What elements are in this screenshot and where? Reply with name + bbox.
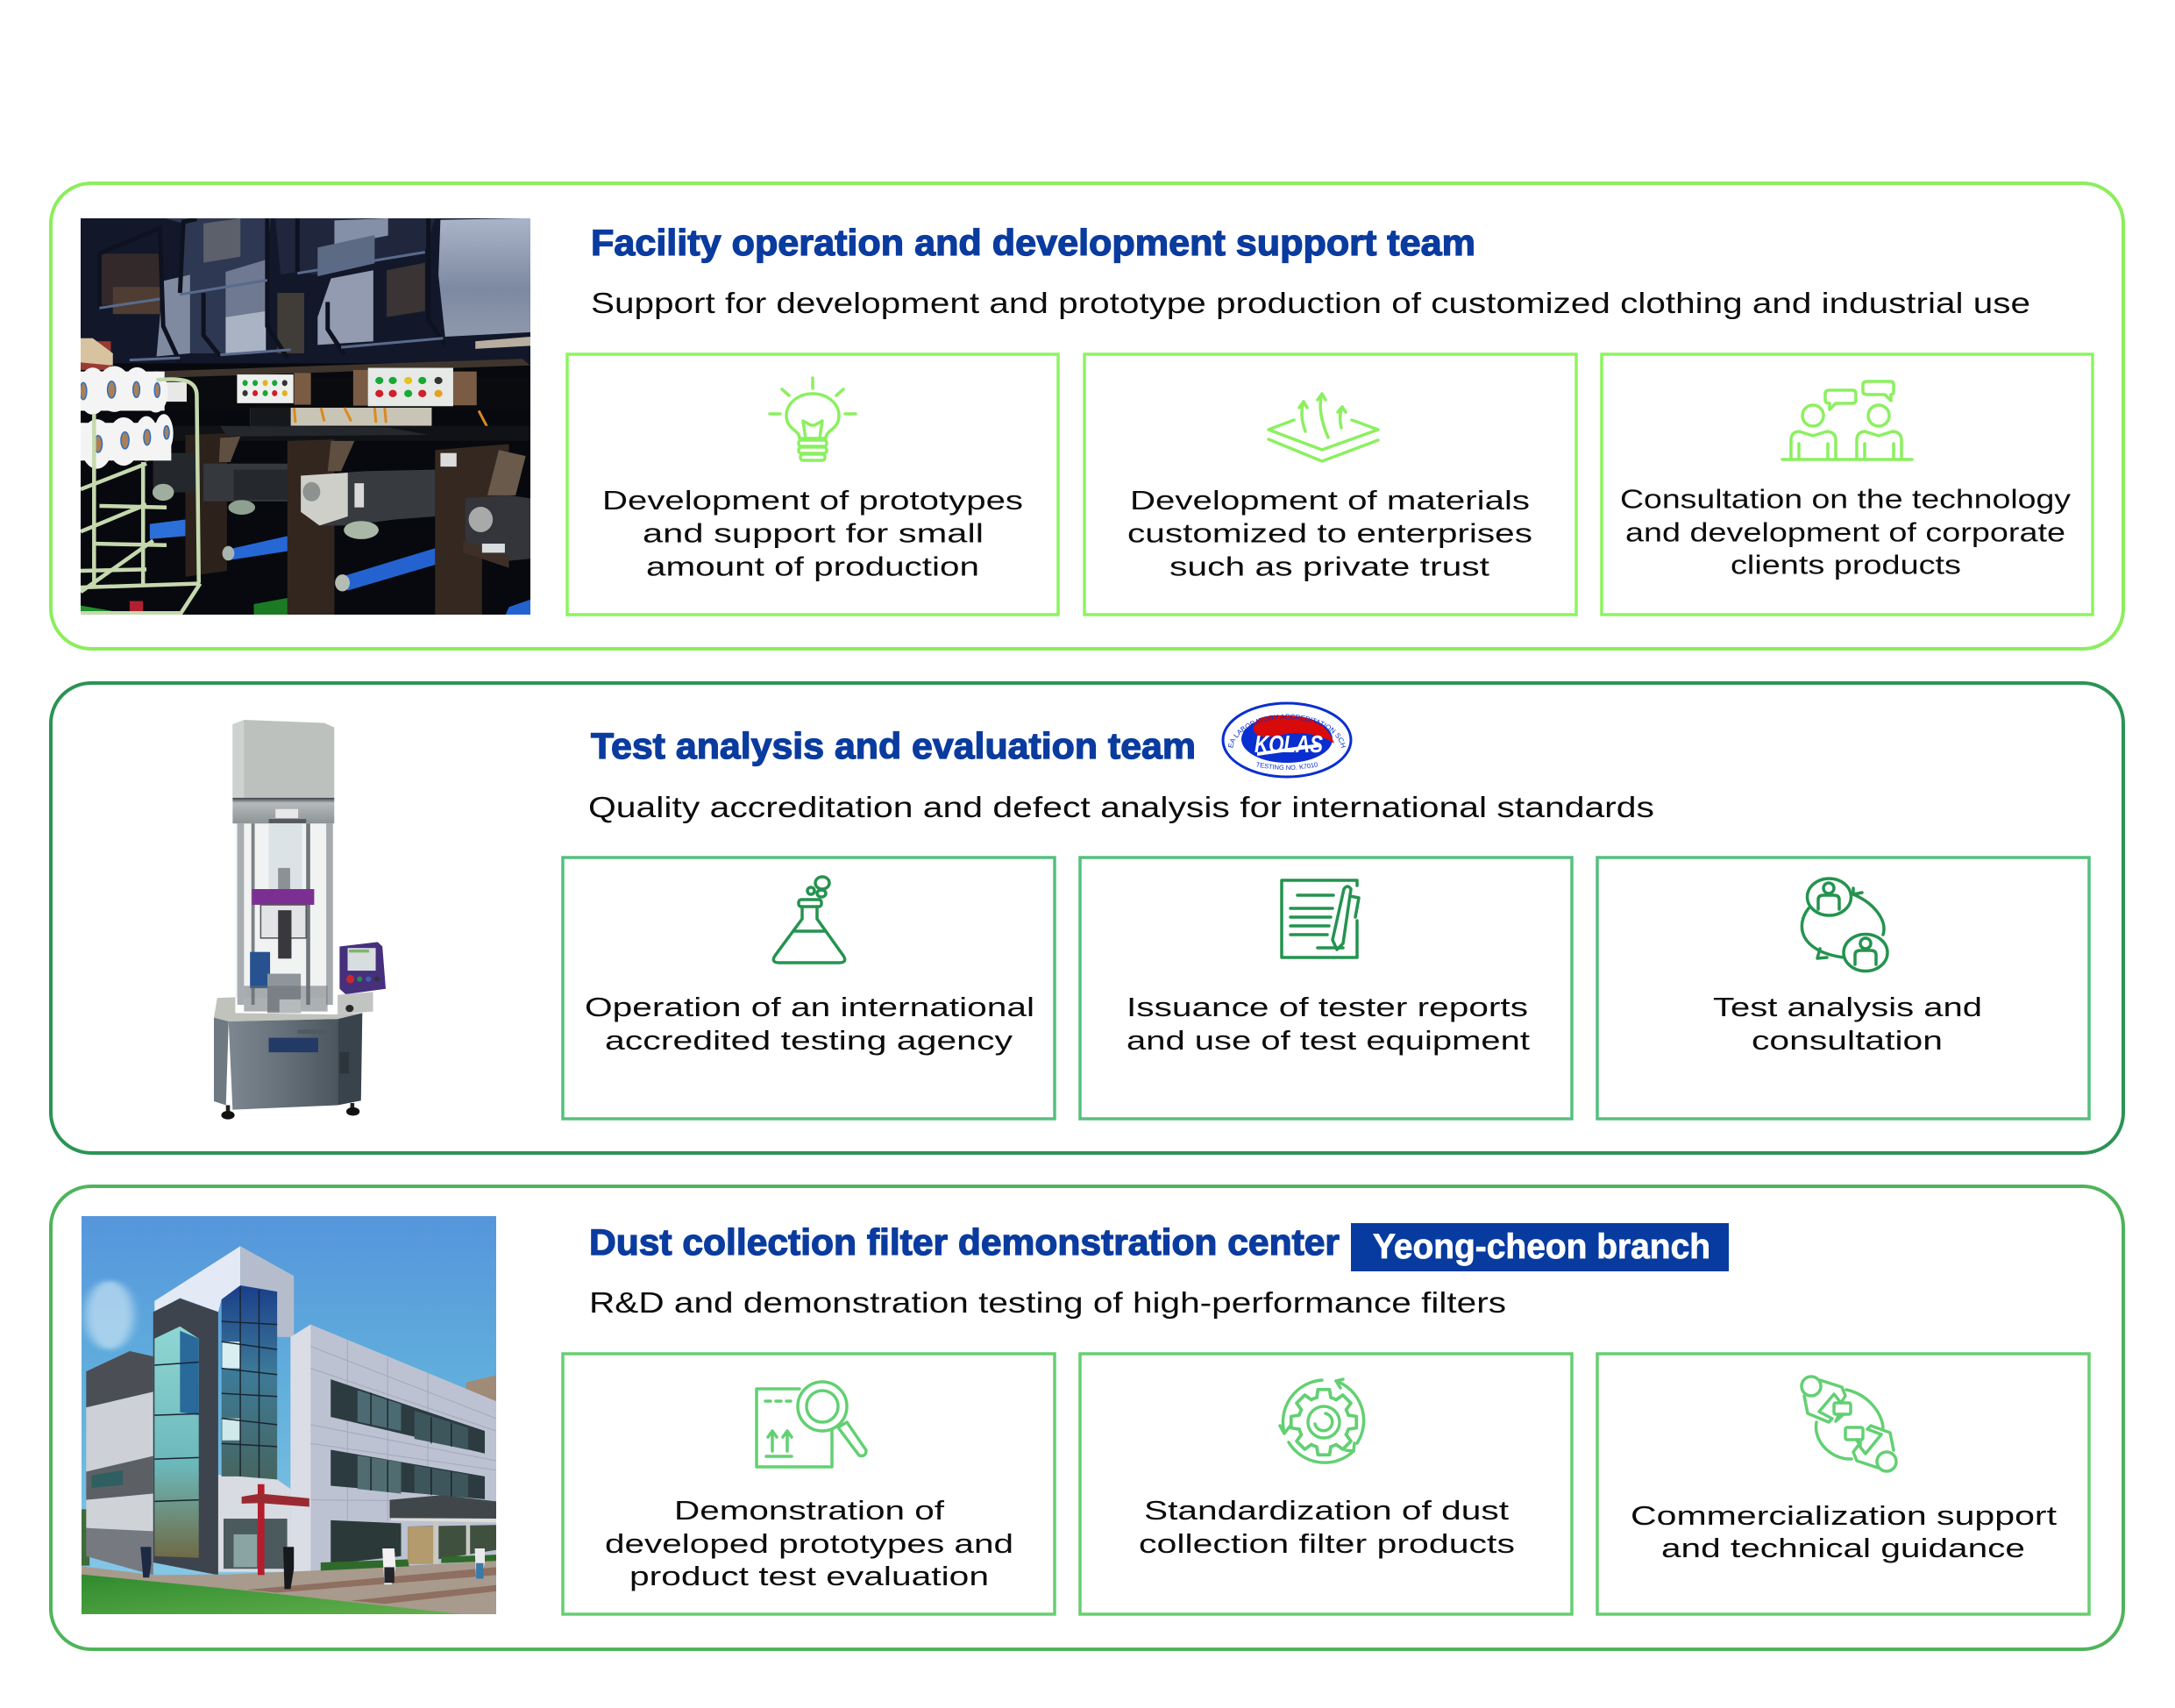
text: card standardization: collection filter products xyxy=(1139,1528,1515,1559)
card: standardization xyxy=(1080,1354,1572,1614)
panel: facility operation team xyxy=(51,183,2123,649)
card: materials xyxy=(1084,354,1576,615)
text: card consultation: clients products xyxy=(1731,549,1961,580)
photo: demonstration center building xyxy=(82,1216,496,1614)
text: card prototypes: and support for small xyxy=(643,517,984,549)
text: card consultation: Consultation on the technology xyxy=(1620,484,2072,514)
text: card standardization xyxy=(1139,1495,1515,1559)
text: card materials xyxy=(1127,485,1532,582)
text: card reports xyxy=(1127,992,1530,1056)
icon: document and magnifier xyxy=(757,1382,866,1467)
icon: document and pen xyxy=(1282,880,1359,957)
text: card reports: Issuance of tester reports xyxy=(1127,992,1528,1022)
text: card agency xyxy=(585,992,1034,1056)
icon: two people talking xyxy=(1782,381,1912,459)
card: commercialization xyxy=(1597,1354,2089,1614)
card: prototype demonstration xyxy=(563,1354,1055,1614)
icon: flask xyxy=(773,877,845,963)
text: card prototypes xyxy=(602,485,1023,582)
icon: exchange between people xyxy=(1802,1377,1896,1471)
text: card demonstration: Demonstration of xyxy=(674,1495,944,1526)
logo: KOLAS accreditation: TESTING NO. K7010 xyxy=(1257,762,1318,770)
card: prototypes xyxy=(567,354,1058,615)
photo: impact test machine xyxy=(214,720,386,1120)
badge: Yeong-cheon branch: Yeong-cheon branch xyxy=(1373,1228,1710,1266)
text: card commercialization xyxy=(1631,1500,2057,1563)
logo: KOLAS accreditation: KOREA LABORATORY ACCREDITATION SCHEME xyxy=(1227,714,1347,748)
card: tester reports xyxy=(1080,858,1572,1119)
text: card materials: customized to enterprises xyxy=(1127,517,1532,549)
card: consultation xyxy=(1602,354,2093,615)
text: card agency: Operation of an international xyxy=(585,992,1034,1022)
text: card test consultation xyxy=(1713,992,1982,1056)
text: card test consultation: consultation xyxy=(1752,1025,1943,1056)
text: card commercialization: and technical guidance xyxy=(1661,1533,2025,1563)
text: filter center description: R&D and demonstration testing of high-performance filters xyxy=(589,1286,1506,1319)
photo: textile machinery xyxy=(81,218,530,615)
icon: material layers xyxy=(1269,394,1378,461)
text: card prototypes: Development of prototypes xyxy=(602,485,1023,516)
text: card demonstration: developed prototypes and xyxy=(605,1528,1013,1559)
text: card commercialization: Commercialization support xyxy=(1631,1500,2057,1531)
text: card demonstration: product test evaluation xyxy=(629,1561,989,1591)
card: test consultation xyxy=(1597,858,2089,1119)
text: card demonstration xyxy=(605,1495,1013,1591)
text: card materials: such as private trust xyxy=(1169,551,1489,582)
text: card consultation xyxy=(1620,484,2072,580)
panel: test analysis team xyxy=(49,681,2125,1155)
text: card reports: and use of test equipment xyxy=(1127,1025,1530,1056)
card: accredited agency xyxy=(563,858,1055,1119)
text: facility team description: Support for development and prototype production of customized clothing and industrial use xyxy=(591,287,2030,319)
text: card standardization: Standardization of dust xyxy=(1144,1495,1509,1526)
heading: dust collection center: Dust collection filter demonstration center xyxy=(589,1221,1340,1263)
text: card test consultation: Test analysis and xyxy=(1713,992,1982,1022)
text: card agency: accredited testing agency xyxy=(605,1025,1013,1056)
heading: facility team: Facility operation and development support team xyxy=(591,222,1475,263)
text: card prototypes: amount of production xyxy=(646,551,979,582)
icon: people cycle xyxy=(1802,879,1887,971)
panel: dust collection filter center xyxy=(51,1186,2123,1649)
logo: KOLAS accreditation: KOLAS xyxy=(1255,730,1323,758)
text: card materials: Development of materials xyxy=(1130,485,1530,516)
icon: light bulb xyxy=(770,378,856,460)
heading: test analysis team: Test analysis and evaluation team xyxy=(591,725,1196,766)
text: card consultation: and development of corporate xyxy=(1625,517,2065,547)
logo: KOLAS accreditation xyxy=(1222,701,1352,779)
text: test team description: Quality accreditation and defect analysis for international standards xyxy=(588,791,1654,823)
icon: gear with arrows xyxy=(1280,1379,1364,1462)
